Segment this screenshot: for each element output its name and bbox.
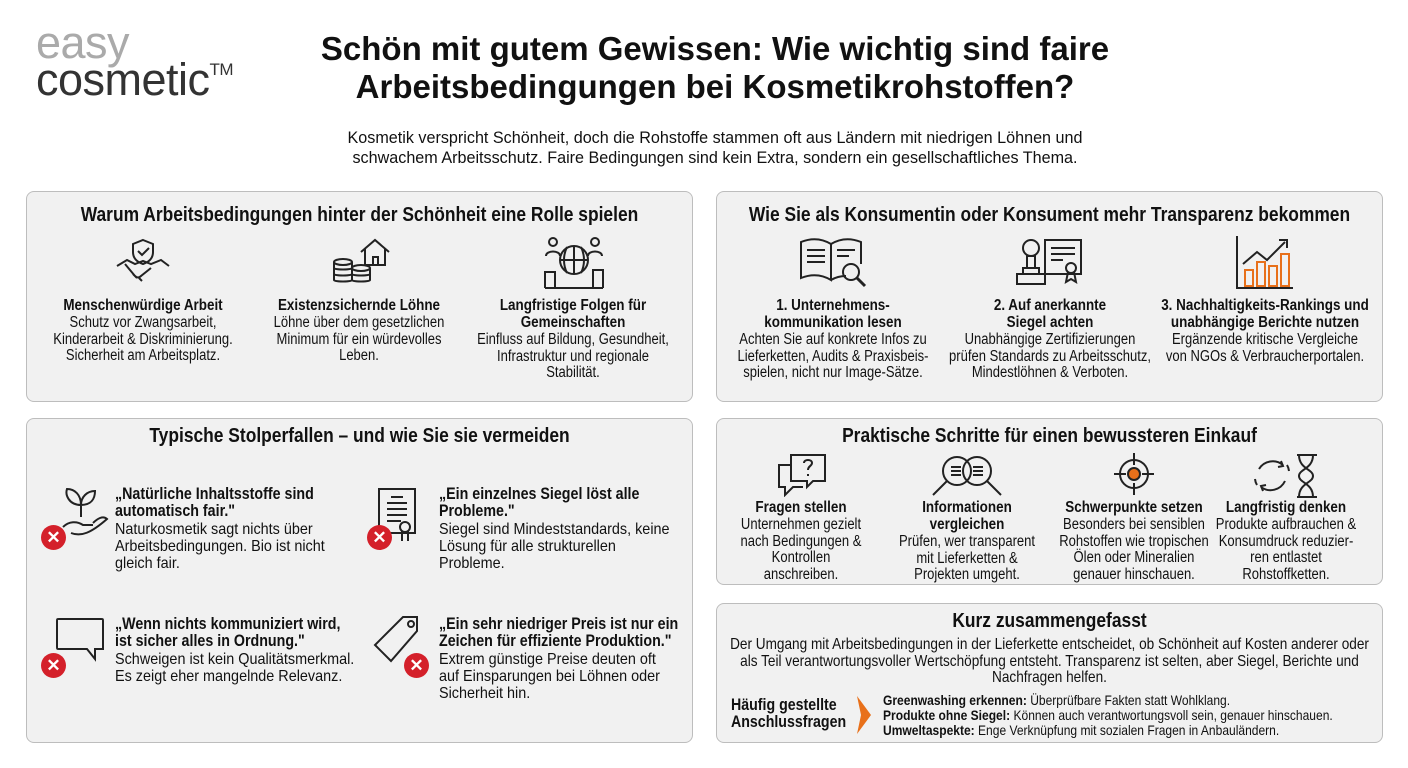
icon: x <box>404 653 429 678</box>
pitfall: kommuniziert: ist sicher alles in Ordnung." <box>115 632 305 650</box>
faq label <box>731 696 846 731</box>
pitfall: natürlich: „Natürliche Inhaltsstoffe sind <box>115 485 314 503</box>
faq list: Greenwashing erkennen: Überprüfbare Fakten statt Wohlklang. <box>883 692 1230 708</box>
item: rankings: von NGOs & Verbraucherportalen. <box>1166 348 1364 364</box>
pitfall: kommuniziert <box>115 615 354 685</box>
title: Arbeitsbedingungen bei Kosmetikrohstoffen? <box>356 68 1074 105</box>
step: langfristig <box>1216 499 1356 582</box>
item: siegel: Siegel achten <box>1007 314 1093 331</box>
pitfall: siegel: Lösung für alle strukturellen <box>439 538 616 555</box>
step: fragen: nach Bedingungen & <box>741 532 861 550</box>
panel: stolperfallen <box>26 418 693 743</box>
item: folgen: Infrastruktur und regionale <box>497 348 649 364</box>
item: kommunikation <box>737 297 929 381</box>
step: schwerpunkte: Schwerpunkte setzen <box>1065 499 1203 516</box>
step: schwerpunkte <box>1059 499 1209 582</box>
item: kommunikation: 1. Unternehmens- <box>776 297 890 314</box>
item: kommunikation: spielen, nicht nur Image-Sätze. <box>743 364 923 381</box>
title: Schön mit gutem Gewissen: Wie wichtig sind faire <box>321 30 1109 67</box>
pitfall: natürlich <box>115 485 325 572</box>
logo <box>36 17 233 105</box>
icon: arrow <box>857 696 871 734</box>
icon: magnifiers <box>932 456 1002 496</box>
icon: bar chart <box>1236 236 1293 289</box>
step: langfristig: ren entlastet <box>1250 549 1322 566</box>
pitfall: kommuniziert: Es zeigt eher mangelnde Relevanz. <box>115 668 342 685</box>
pitfall: natürlich: gleich fair. <box>115 555 180 572</box>
heading: Warum Arbeitsbedingungen hinter der Schönheit eine Rolle spielen <box>81 204 638 226</box>
faq list: Produkte ohne Siegel: Können auch verantwortungsvoll sein, genauer hinschauen. <box>883 707 1333 723</box>
icon: handshake <box>116 238 170 282</box>
item: löhne: Minimum für ein würdevolles <box>277 330 441 348</box>
panel: kurz zusammengefasst <box>716 603 1383 743</box>
item: folgen: Stabilität. <box>546 364 600 381</box>
icon: speech bubble <box>56 618 104 662</box>
icon: book magnifier <box>800 238 866 287</box>
item: menschenwürdige arbeit: Kinderarbeit & Diskriminierung. <box>53 330 233 348</box>
logo: cosmeticTM <box>36 54 233 105</box>
item: folgen: Gemeinschaften <box>521 314 625 331</box>
logo: easy <box>36 17 129 68</box>
step: fragen: anschreiben. <box>764 566 838 582</box>
pitfall: preis: „Ein sehr niedriger Preis ist nur ein <box>439 615 678 633</box>
icon: x <box>367 525 392 550</box>
icon: x: ✕ <box>409 656 424 675</box>
step: informationen: vergleichen <box>930 516 1004 533</box>
icon: stamp certificate <box>1016 239 1082 285</box>
item: kommunikation: Lieferketten, Audits & Praxisbeis- <box>737 348 929 364</box>
icon: plant hand <box>62 488 108 536</box>
icon: question bubble <box>778 454 826 497</box>
step: informationen: mit Lieferketten & <box>916 550 1018 566</box>
icon: price tag <box>374 616 418 662</box>
step: langfristig: Rohstoffketten. <box>1242 566 1330 582</box>
pitfall: preis: Zeichen für effiziente Produktion." <box>439 632 671 650</box>
item: kommunikation: Achten Sie auf konkrete Infos zu <box>739 331 927 348</box>
item: löhne: Löhne über dem gesetzlichen <box>274 314 444 331</box>
item: siegel: Mindestlöhnen & Verboten. <box>972 364 1128 381</box>
item: löhne: Existenzsichernde Löhne <box>278 297 440 314</box>
item: kommunikation: kommunikation lesen <box>764 314 902 331</box>
pitfall: siegel: Probleme." <box>439 502 515 520</box>
icon: x <box>41 525 66 550</box>
step: informationen: Informationen <box>922 499 1012 516</box>
subtitle: Kosmetik verspricht Schönheit, doch die Rohstoffe stammen oft aus Ländern mit niedrigen Löhnen und <box>348 128 1082 147</box>
step: schwerpunkte: Besonders bei sensiblen <box>1063 516 1205 533</box>
pitfall: preis: auf Einsparungen bei Löhnen oder <box>439 668 660 685</box>
heading: Praktische Schritte für einen bewussteren Einkauf <box>842 425 1257 447</box>
pitfall: preis: Sicherheit hin. <box>439 685 530 702</box>
summary text: als Teil verantwortungsvoller Wertschöpfung entsteht. Transparenz ist selten, aber Siegel, Berichte und <box>740 652 1359 670</box>
item: löhne: Leben. <box>339 347 379 364</box>
pitfall: kommuniziert: Schweigen ist kein Qualitätsmerkmal. <box>115 651 354 668</box>
panel: praktische schritte <box>716 418 1383 585</box>
item: menschenwürdige arbeit: Menschenwürdige Arbeit <box>63 297 223 314</box>
step: schwerpunkte: Ölen oder Mineralien <box>1074 549 1194 566</box>
item: rankings: unabhängige Berichte nutzen <box>1171 314 1359 331</box>
pitfall: preis <box>439 615 678 702</box>
pitfall: natürlich: Arbeitsbedingungen. Bio ist nicht <box>115 538 325 555</box>
summary text: Der Umgang mit Arbeitsbedingungen in der Lieferkette entscheidet, ob Schönheit auf Kosten anderer oder <box>730 636 1369 653</box>
item: menschenwürdige arbeit: Sicherheit am Arbeitsplatz. <box>66 347 220 364</box>
icon: coins house <box>333 238 390 282</box>
pitfall: kommuniziert: „Wenn nichts kommuniziert wird, <box>115 615 340 633</box>
item: rankings: 3. Nachhaltigkeits-Rankings und <box>1161 297 1369 314</box>
step: langfristig: Produkte aufbrauchen & <box>1216 516 1356 533</box>
step: fragen: Fragen stellen <box>755 499 847 516</box>
icon: x: ✕ <box>46 656 61 675</box>
step: langfristig: Langfristig denken <box>1226 499 1346 516</box>
pitfall: siegel <box>439 485 670 572</box>
step: langfristig: Konsumdruck reduzier- <box>1219 532 1353 550</box>
icon: x: ✕ <box>372 528 387 547</box>
pitfall: natürlich: Naturkosmetik sagt nichts über <box>115 521 313 538</box>
icon: document <box>378 488 416 541</box>
panel: warum <box>26 191 693 402</box>
item: rankings <box>1161 297 1369 364</box>
item: folgen: Einfluss auf Bildung, Gesundheit, <box>477 331 669 348</box>
pitfall: siegel: Probleme. <box>439 555 505 572</box>
step: informationen: Prüfen, wer transparent <box>899 533 1035 550</box>
summary text: Nachfragen helfen. <box>992 669 1107 686</box>
item: siegel: 2. Auf anerkannte <box>994 297 1106 314</box>
summary text <box>730 636 1369 686</box>
step: schwerpunkte: genauer hinschauen. <box>1073 566 1195 582</box>
heading: Wie Sie als Konsumentin oder Konsument mehr Transparenz bekommen <box>749 204 1350 226</box>
faq label: Häufig gestellte <box>731 696 837 714</box>
faq list: Umweltaspekte: Enge Verknüpfung mit sozialen Fragen in Anbauländern. <box>883 722 1279 738</box>
icon: x <box>41 653 66 678</box>
subtitle: schwachem Arbeitsschutz. Faire Bedingungen sind kein Extra, sondern ein gesellschaftliches Thema. <box>352 148 1078 167</box>
pitfall: siegel: Siegel sind Mindeststandards, keine <box>439 521 670 538</box>
step: fragen: Kontrollen <box>772 549 830 566</box>
item: menschenwürdige arbeit <box>53 297 233 364</box>
item: rankings: Ergänzende kritische Vergleiche <box>1172 331 1358 348</box>
item: menschenwürdige arbeit: Schutz vor Zwangsarbeit, <box>70 314 216 331</box>
item: folgen: Langfristige Folgen für <box>500 297 646 314</box>
item: siegel <box>949 297 1151 381</box>
panel: transparenz <box>716 191 1383 402</box>
icon: x: ✕ <box>46 528 61 547</box>
icon: globe community <box>544 237 604 289</box>
pitfall: siegel: „Ein einzelnes Siegel löst alle <box>439 485 639 503</box>
pitfall: natürlich: automatisch fair." <box>115 502 235 520</box>
item: siegel: Unabhängige Zertifizierungen <box>965 331 1135 348</box>
item: löhne <box>274 297 444 364</box>
step: fragen: Unternehmen gezielt <box>741 516 861 533</box>
step: informationen: Projekten umgeht. <box>914 566 1020 583</box>
title <box>321 30 1109 105</box>
pitfall: preis: Extrem günstige Preise deuten oft <box>439 651 656 668</box>
icon: cycle hourglass <box>1254 454 1317 498</box>
item: siegel: prüfen Standards zu Arbeitsschutz, <box>949 348 1151 364</box>
subtitle <box>348 128 1082 167</box>
step: schwerpunkte: Rohstoffen wie tropischen <box>1059 532 1209 550</box>
heading: Typische Stolperfallen – und wie Sie sie vermeiden <box>149 425 570 447</box>
faq list <box>883 692 1333 738</box>
faq label: Anschlussfragen <box>731 713 846 731</box>
item: folgen <box>477 297 669 381</box>
step: fragen <box>741 499 862 582</box>
step: informationen <box>899 499 1035 583</box>
icon: target <box>1114 453 1154 495</box>
heading: Kurz zusammengefasst <box>952 610 1147 632</box>
